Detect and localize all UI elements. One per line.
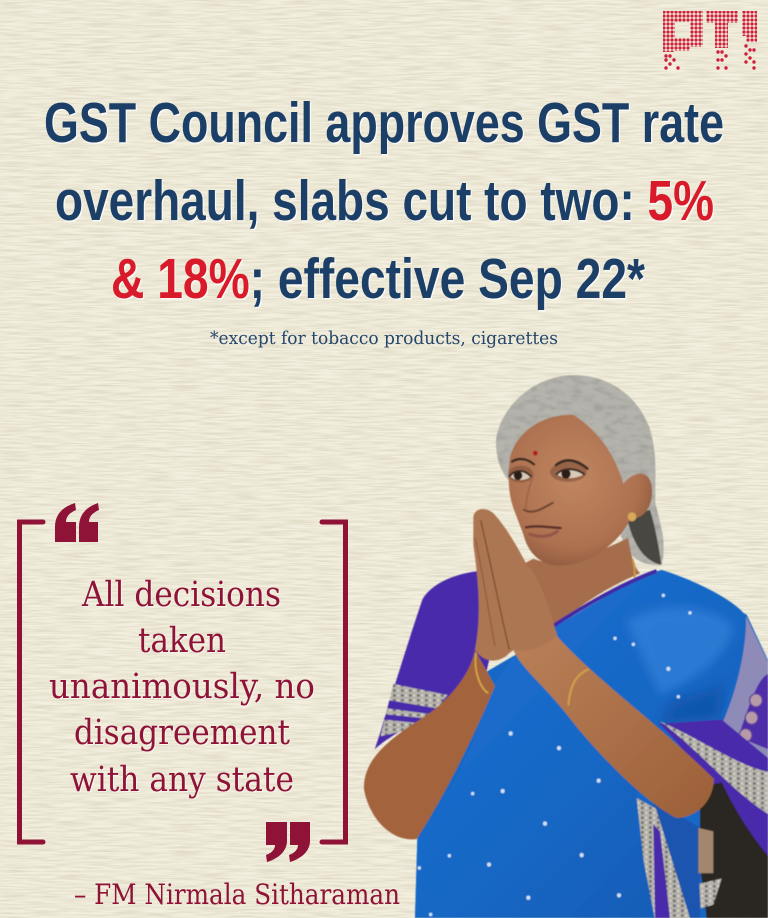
blouse [375,571,500,749]
blouse sleeve border [381,684,447,736]
bindi [533,451,538,456]
medallions on border [739,694,762,742]
opening quote mark [55,503,99,542]
footnote: *except for tobacco products, cigarettes [210,328,558,349]
finger lines [475,520,509,650]
photo: Nirmala Sitharaman in blue saree [364,375,768,918]
attribution: – FM Nirmala Sitharaman [74,878,400,911]
hair [496,375,664,565]
title [44,91,724,311]
saree dots [418,594,692,916]
quote text: unanimously, no [49,667,315,707]
face [509,415,652,566]
right bracket [322,522,346,842]
closing quote mark [266,822,310,862]
quote text: All decisions [81,575,281,615]
saree body [415,570,746,918]
quote text: disagreement [74,713,290,753]
right arm [513,636,714,818]
quote text: taken [138,621,226,661]
logo: PTI dot matrix [663,11,757,70]
saree neckline border [552,571,657,627]
saree fold shadow [660,685,723,726]
title: & 18%; effective Sep 22* [111,247,646,311]
left bracket [20,522,43,842]
saree highlight [627,608,733,695]
left arm [364,650,495,839]
lower saree fold [653,800,700,918]
saree border at shoulder [722,616,768,758]
title: overhaul, slabs cut to two: 5% [55,169,714,233]
hair bun shadow [627,510,661,565]
quote text [49,575,315,800]
quote text: with any state [70,760,294,800]
bangles [475,653,589,706]
eye sockets [508,462,587,483]
saree underlayer [415,571,768,918]
neck and chest [520,538,640,629]
necklace [633,559,635,578]
pallu border [659,720,768,859]
dark fabric [700,782,768,918]
earring [628,512,636,521]
quote panel [20,503,400,911]
eyes [511,469,584,480]
facial lines [509,459,587,536]
praying hands [473,509,557,661]
